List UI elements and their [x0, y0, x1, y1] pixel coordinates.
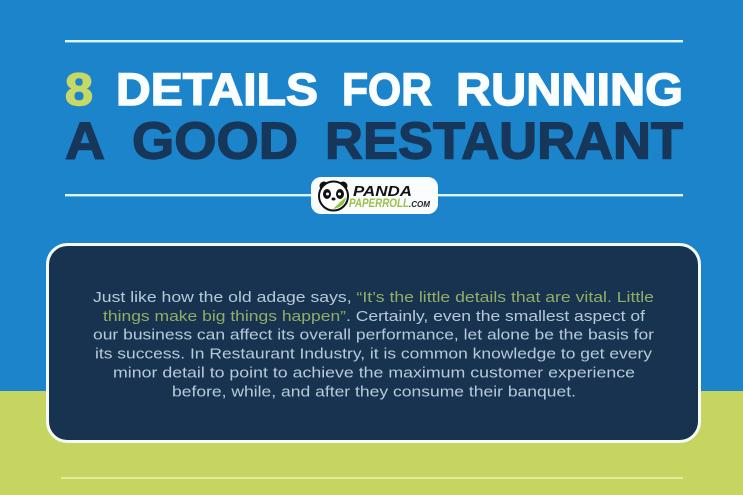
intro text	[93, 289, 654, 400]
panel: introduction	[48, 244, 700, 442]
title line one: RUNNING	[456, 64, 683, 115]
intro text: Just like how the old adage says, “It’s the little details that are vital. Little	[93, 289, 654, 306]
intro text: our business can affect its overall performance, let alone be the basis for	[93, 326, 654, 344]
intro text: its success. In Restaurant Industry, it is common knowledge to get every	[95, 346, 653, 362]
title	[65, 64, 683, 170]
title line two: A	[65, 112, 105, 170]
title line two: RESTAURANT	[325, 112, 683, 170]
icon: panda head	[319, 182, 348, 210]
title line two: GOOD	[132, 112, 298, 170]
title line one: FOR	[342, 64, 432, 115]
logo domain: .COM	[409, 200, 430, 209]
panel box	[48, 244, 700, 442]
intro text: before, while, and after they consume their banquet.	[172, 384, 576, 400]
intro text: minor detail to point to achieve the maximum customer experience	[113, 364, 635, 382]
title line two	[65, 112, 683, 170]
lower title rule	[65, 194, 683, 196]
title line one: DETAILS	[116, 64, 318, 115]
bottom rule	[61, 477, 683, 479]
green lower background band	[0, 391, 743, 495]
logo: Panda Paperroll	[311, 177, 438, 214]
intro text: things make big things happen” . Certainly, even the smallest aspect of	[103, 308, 646, 325]
title line one	[65, 64, 683, 115]
logo wordmark: PANDA	[353, 183, 412, 200]
title line one: 8	[65, 64, 93, 115]
logo sub-wordmark: PAPERROLL	[349, 196, 409, 210]
logo badge	[311, 177, 438, 214]
top rule	[65, 40, 683, 42]
